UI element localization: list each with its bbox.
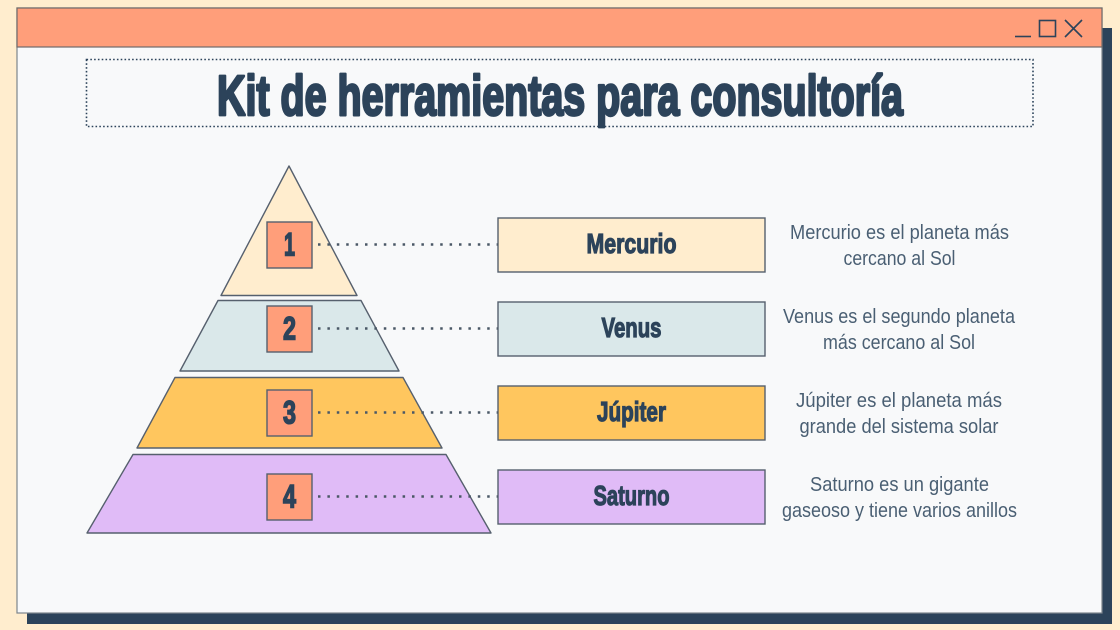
description: Mercurio [790,221,1009,270]
pyramid tier 2 [180,300,399,371]
description: Saturno: gaseoso y tiene varios anillos [782,499,1017,522]
number badge 1: 1 [284,226,295,262]
number badge 3: 3 [283,394,296,430]
description: Júpiter: grande del sistema solar [800,415,999,438]
description: Venus [783,305,1016,354]
description: Venus: más cercano al Sol [823,331,975,354]
description: Júpiter [796,389,1002,438]
description: Saturno [782,473,1017,522]
description: Venus: Venus es el segundo planeta [783,305,1016,328]
number badge 4 [267,474,312,520]
pyramid tier 1 [221,166,357,296]
label: Mercurio: Mercurio [586,228,676,259]
label: Júpiter [498,386,765,440]
label: Mercurio [498,218,765,272]
label: Venus: Venus [602,312,662,343]
description: Mercurio: Mercurio es el planeta más [790,221,1009,244]
number badge 2: 2 [283,310,296,346]
description: Mercurio: cercano al Sol [844,247,956,270]
description: Saturno: Saturno es un gigante [810,473,989,496]
label: Saturno [498,470,765,524]
number badge 1 [267,222,312,268]
icon: window controls [1015,20,1082,37]
pyramid [87,166,491,533]
number badge 3 [267,390,312,436]
label: Venus [498,302,765,356]
pyramid tier 3 [137,378,442,448]
number badge 4: 4 [283,478,296,514]
window header bar [17,8,1102,47]
label: Saturno: Saturno [594,480,670,511]
pyramid tier 4 [87,454,491,533]
dotted connectors [318,244,498,496]
description: Júpiter: Júpiter es el planeta más [796,389,1002,412]
label: Júpiter: Júpiter [597,396,666,427]
number badge 2 [267,306,312,352]
